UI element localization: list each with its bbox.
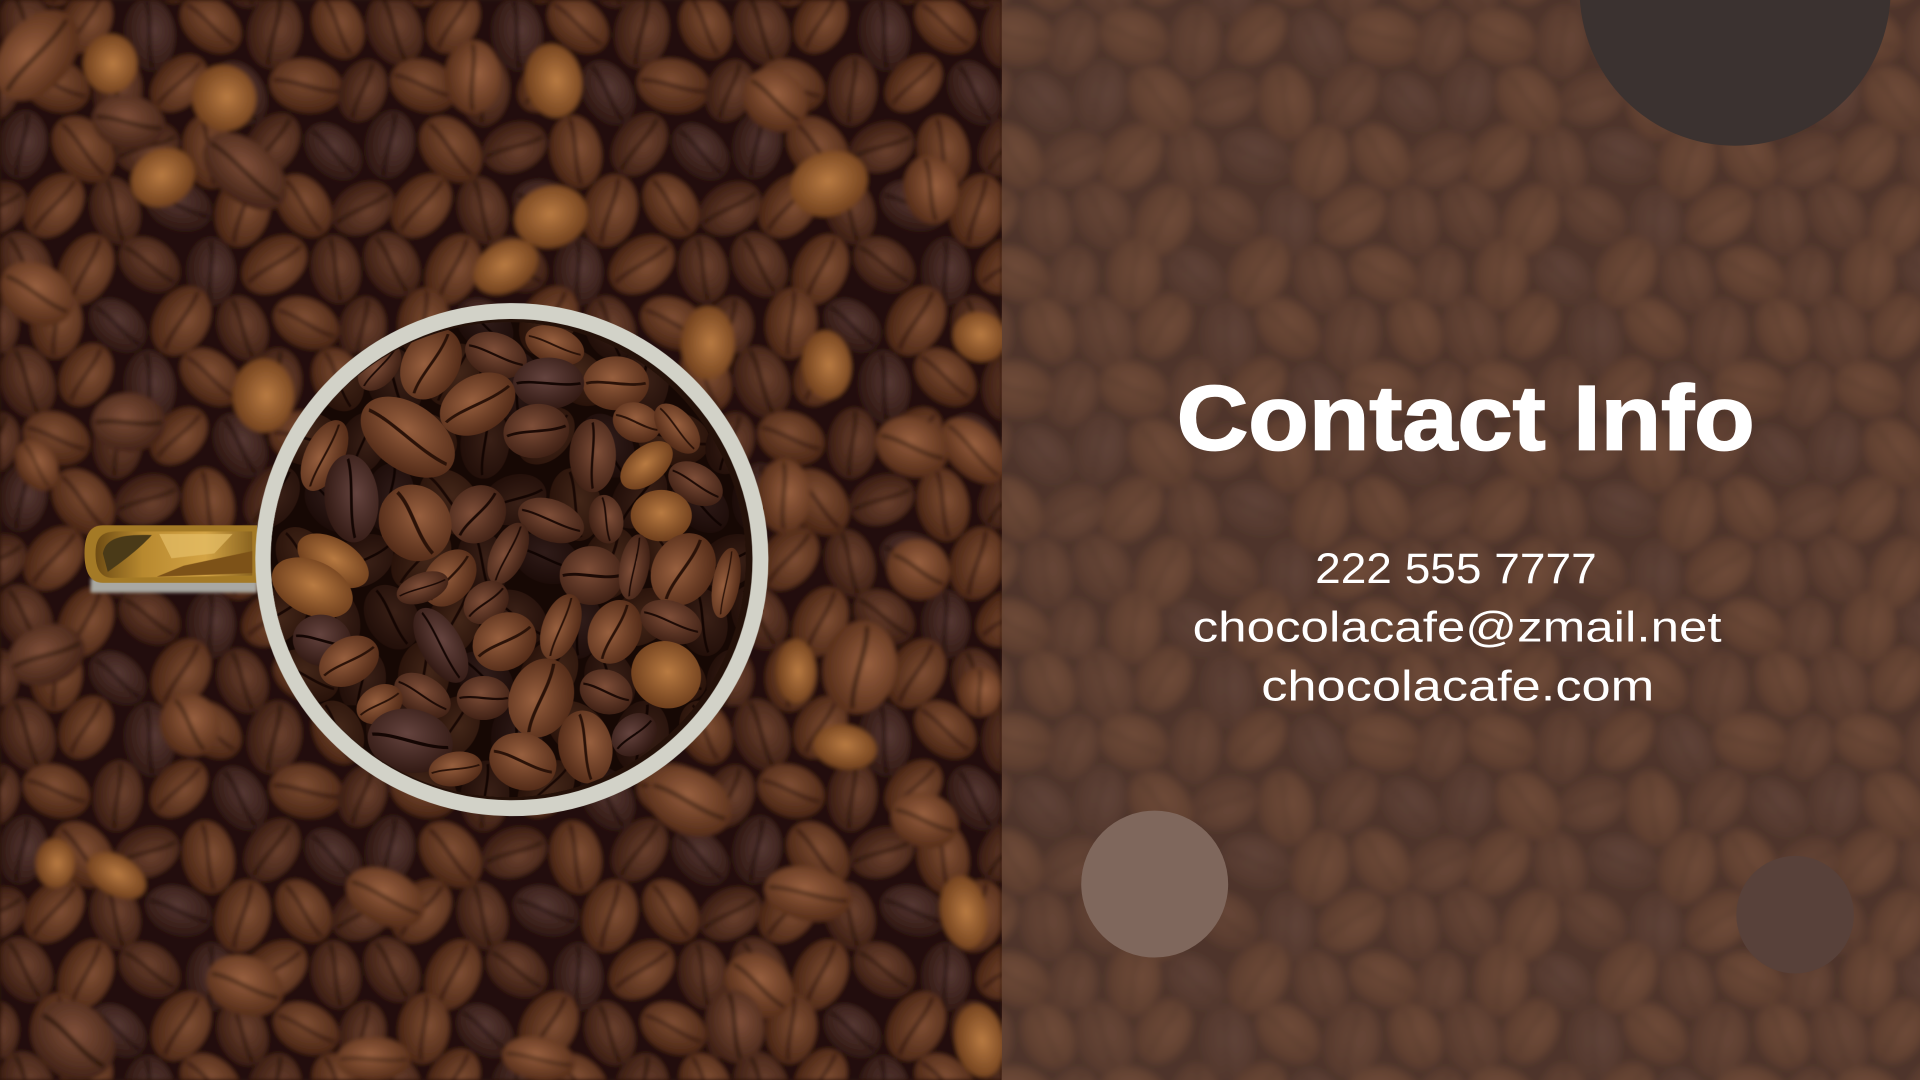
website: chocolacafe.com (1261, 662, 1654, 710)
background bean field (0, 0, 1018, 1080)
icon: mug handle (84, 525, 257, 593)
decor: lower left circle (1081, 811, 1228, 958)
blurred bean field (980, 0, 1920, 1080)
email address: chocolacafe@zmail.net (1193, 604, 1722, 652)
title: Contact Info (1177, 367, 1755, 469)
phone number: 222 555 7777 (1315, 545, 1597, 593)
icon: mug rim (263, 311, 760, 808)
contact details (1193, 545, 1722, 710)
panel: coffee beans photo (0, 0, 1018, 1080)
decor: lower right circle (1736, 856, 1854, 973)
mug beans (262, 317, 746, 800)
panel: contact background (980, 0, 1920, 1080)
decor: top dark circle (1580, 0, 1891, 146)
brown overlay (1002, 0, 1920, 1080)
